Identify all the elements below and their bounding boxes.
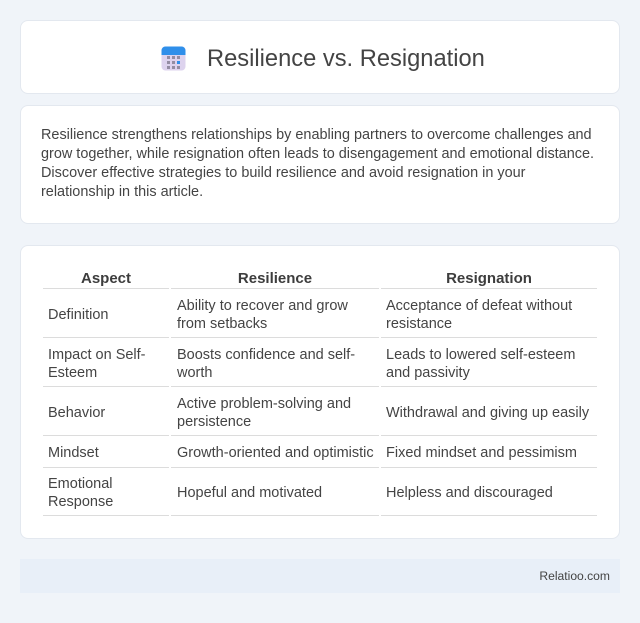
cell: Resilience definition: Ability to recover and grow <box>177 298 348 314</box>
cell: Resignation definition: resistance <box>386 316 452 332</box>
cell: Resilience behavior: persistence <box>177 414 251 430</box>
cell: Resignation impact <box>386 347 575 381</box>
cell: Resilience behavior <box>177 396 351 430</box>
row: Emotional Response: Emotional <box>48 476 112 492</box>
footer text: Relatioo.com <box>539 569 610 583</box>
cell: Resignation definition <box>386 298 572 332</box>
cell: Resignation behavior: Withdrawal and giving up easily <box>386 405 589 421</box>
text block: introduction: grow together, while resignation often leads to disengagement and emotional distance. <box>41 146 594 162</box>
cell: Resilience mindset: Growth-oriented and optimistic <box>177 445 374 461</box>
footer <box>20 559 620 593</box>
table header: Resilience: Resilience <box>238 270 312 287</box>
cell: Resilience emotional response: Hopeful and motivated <box>177 485 322 501</box>
cell: Resilience definition <box>177 298 348 332</box>
row: Definition: Definition <box>48 307 108 323</box>
row: Impact on Self-Esteem: Esteem <box>48 365 97 381</box>
table header: Resignation: Resignation <box>446 270 532 287</box>
cell: Resilience behavior: Active problem-solving and <box>177 396 351 412</box>
icon: calendar <box>162 46 186 70</box>
cell: Resignation mindset: Fixed mindset and pessimism <box>386 445 577 461</box>
row: Emotional Response <box>48 476 113 510</box>
panel: introduction <box>20 105 620 224</box>
row: Impact on Self-Esteem: Impact on Self- <box>48 347 146 363</box>
cell: Resignation impact: and passivity <box>386 365 470 381</box>
text block: introduction: relationship in this article. <box>41 184 203 200</box>
text block: introduction <box>41 127 594 200</box>
row: Behavior: Behavior <box>48 405 105 421</box>
row: Mindset: Mindset <box>48 445 99 461</box>
panel: comparison table <box>20 245 620 539</box>
cell: Resignation impact: Leads to lowered self-esteem <box>386 347 575 363</box>
cell: Resilience definition: from setbacks <box>177 316 267 332</box>
text block: introduction: Resilience strengthens relationships by enabling partners to overcome challenges and <box>41 127 592 143</box>
panel: title <box>20 20 620 94</box>
cell: Resilience impact <box>177 347 355 381</box>
table header: Aspect: Aspect <box>81 270 131 287</box>
cell: Resilience impact: worth <box>177 365 212 381</box>
row: Impact on Self-Esteem <box>48 347 146 381</box>
row: Emotional Response: Response <box>48 494 113 510</box>
text block: introduction: Discover effective strategies to build resilience and avoid resignation in your <box>41 165 525 181</box>
cell: Resignation definition: Acceptance of defeat without <box>386 298 572 314</box>
cell: Resilience impact: Boosts confidence and self- <box>177 347 355 363</box>
cell: Resignation emotional response: Helpless and discouraged <box>386 485 553 501</box>
heading: Resilience vs. Resignation <box>207 46 485 72</box>
